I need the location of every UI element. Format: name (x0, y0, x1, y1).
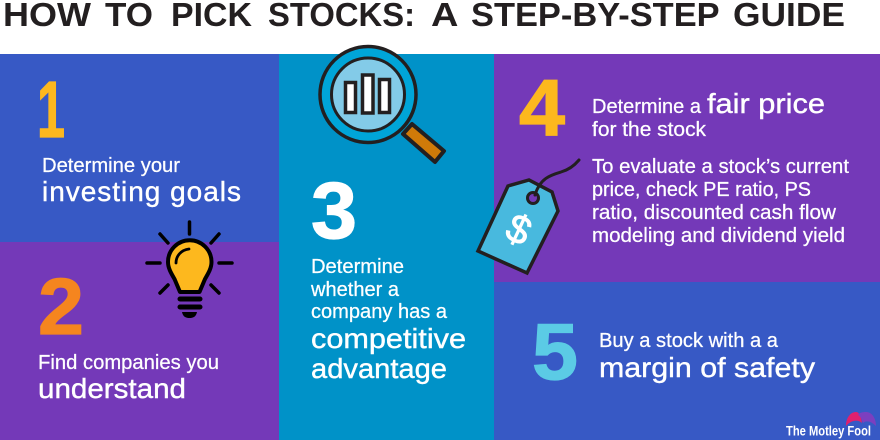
step 4 heading (592, 88, 825, 141)
step 4 body text: To evaluate a stock’s current (592, 156, 849, 178)
panel: step 3 (279, 54, 494, 440)
step 1 number: 1 (37, 65, 65, 154)
step 2 text (38, 352, 219, 404)
panel: step 1 (0, 54, 279, 242)
step 2 number: 2 (38, 262, 84, 351)
step 3 number: 3 (311, 166, 357, 255)
panel: step 2 (0, 242, 279, 440)
step 3 text: competitive (311, 323, 466, 354)
step 4 heading: for the stock (592, 119, 707, 141)
step 4 heading: Determine a (592, 96, 702, 118)
icon: price tag: $ (499, 205, 538, 255)
step 4 body text: ratio, discounted cash flow (592, 202, 837, 224)
step 3 text: Determine (311, 256, 404, 278)
icon: price tag (478, 160, 579, 273)
step 4 heading: fair price (707, 88, 825, 119)
step 3 text: advantage (311, 353, 447, 384)
step 2 text: Find companies you (38, 352, 219, 374)
step 2 text: understand (38, 373, 186, 404)
step 3 text: company has a (311, 301, 448, 323)
logo: The Motley Fool (786, 412, 876, 438)
step 4 body text: price, check PE ratio, PS (592, 179, 811, 201)
step 3 text: whether a (310, 279, 400, 301)
step 5 text: margin of safety (599, 352, 815, 383)
step 4 body text: modeling and dividend yield (592, 225, 845, 247)
panel: step 4 (494, 54, 880, 282)
step 4 body text (592, 156, 849, 247)
step 5 number: 5 (532, 307, 578, 396)
icon: magnifying glass (320, 46, 444, 162)
step 1 text: Determine your (42, 155, 180, 177)
icon: light bulb (147, 222, 232, 318)
step 1 text (42, 155, 241, 207)
step 5 text: Buy a stock with a a (599, 330, 779, 352)
step 3 text (310, 256, 466, 384)
panel: step 5 (494, 282, 880, 440)
step 4 number: 4 (519, 63, 566, 152)
step 5 text (599, 330, 815, 383)
step 1 text: investing goals (42, 176, 241, 207)
